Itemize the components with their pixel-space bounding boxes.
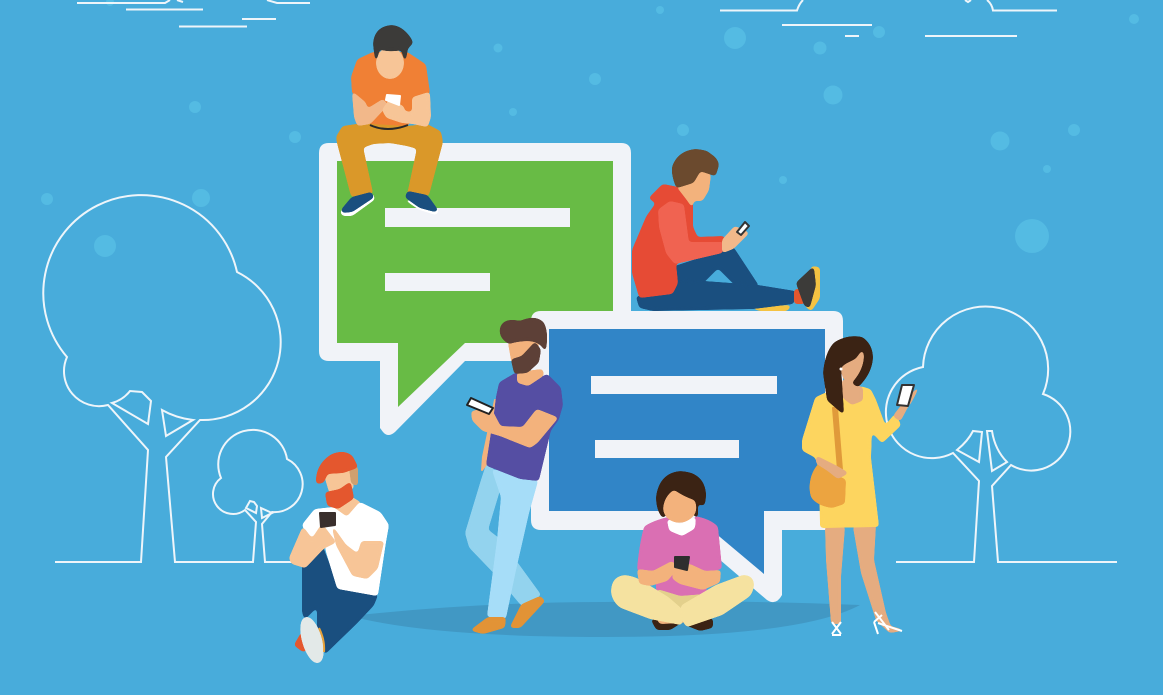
blue speech bubble [531, 311, 843, 602]
green speech bubble [319, 143, 631, 435]
green bubble text line 1 [385, 208, 570, 227]
floating dots [41, 0, 1139, 257]
blue bubble text line 2 [595, 440, 739, 458]
person: man in orange shirt sitting on green bubble [337, 26, 442, 215]
green bubble text line 2 [385, 273, 490, 291]
person: bearded man in purple shirt leaning [466, 319, 562, 633]
tree outline right [886, 307, 1117, 562]
clouds outline top left [77, 0, 310, 26]
clouds outline top right [720, 0, 1057, 36]
ground shadow [350, 601, 860, 637]
person: woman in pink sweater sitting cross-legged [612, 472, 753, 630]
person: man in red hoodie sitting on blue bubble [633, 150, 819, 310]
person: red-bearded man in white shirt sitting [290, 453, 388, 665]
big tree outline left with small tree [43, 195, 303, 562]
blue bubble text line 1 [591, 376, 777, 394]
person: standing woman in yellow dress [803, 337, 918, 635]
